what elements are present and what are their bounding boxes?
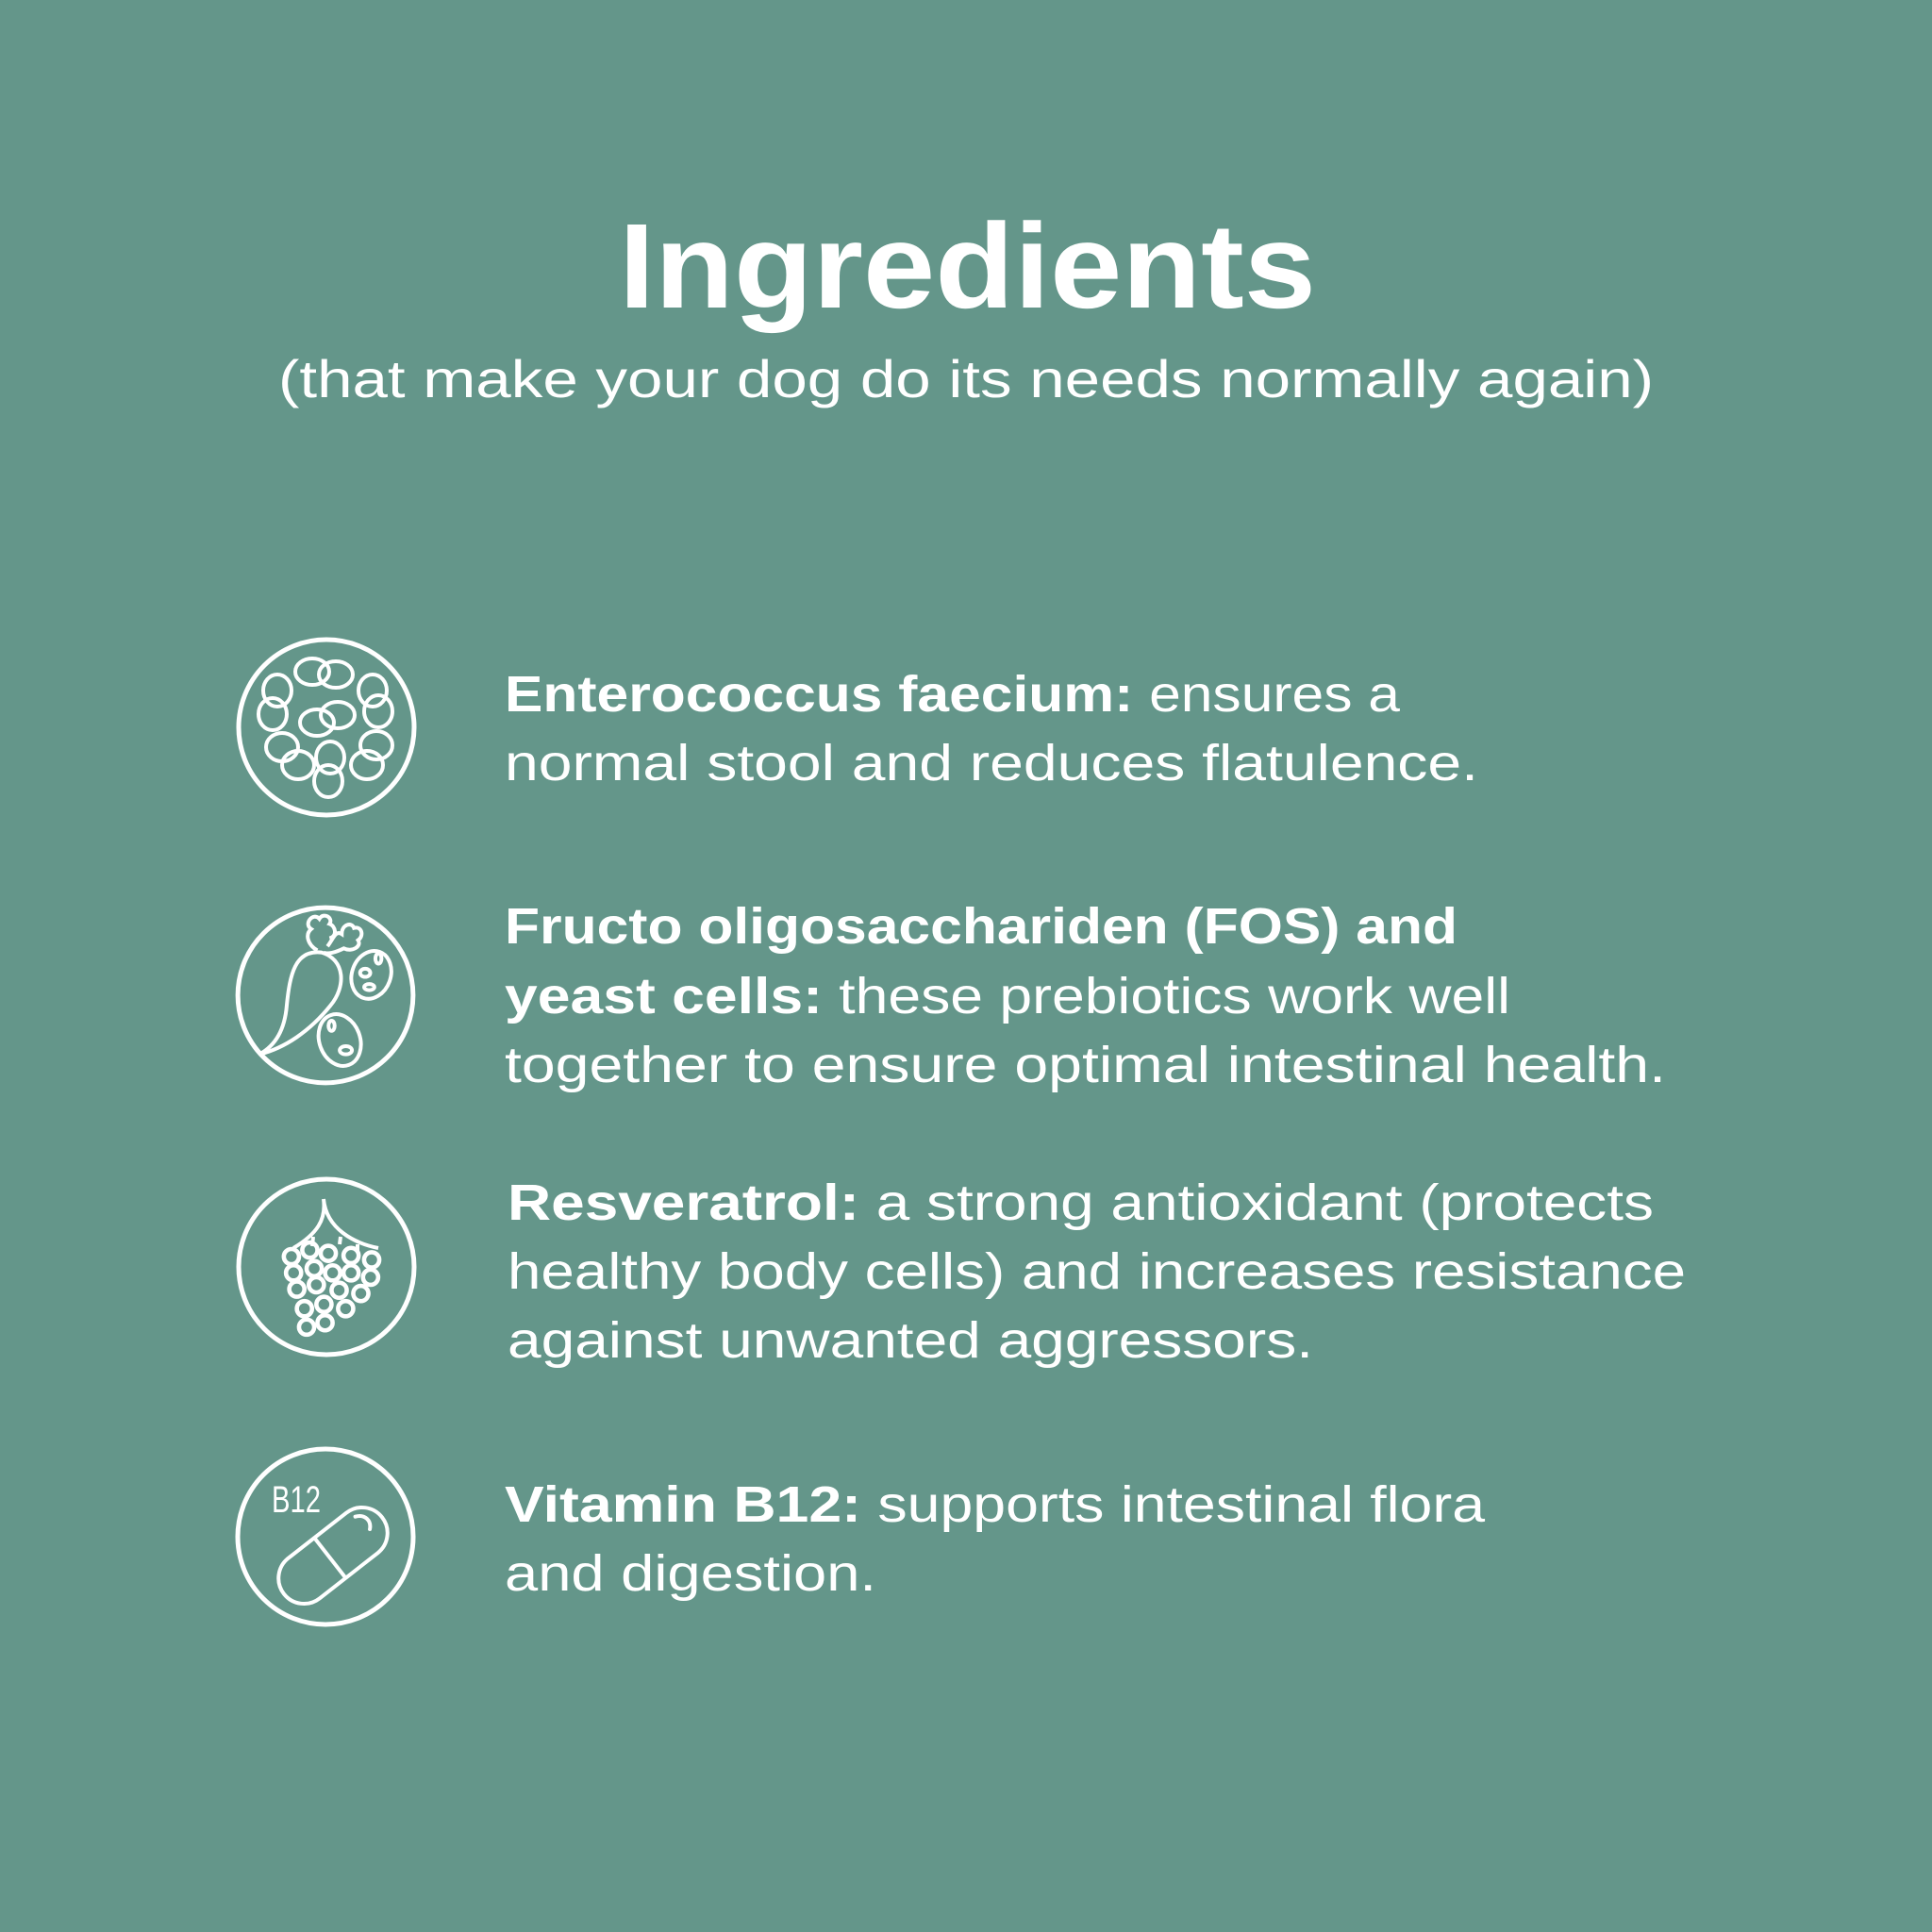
text: Vitamin B12: and digestion.: [505, 1545, 876, 1602]
text: Resveratrol: healthy body cells) and increases resistance: [508, 1243, 1686, 1300]
icon: B12 capsule: B12: [272, 1479, 321, 1521]
icon: carrot and yeast: [238, 908, 413, 1083]
text: Enterococcus: normal stool and reduces flatulence.: [505, 735, 1478, 791]
text: Enterococcus: [505, 666, 1478, 791]
text: FOS: [505, 898, 1666, 1093]
text: Enterococcus: Enterococcus faecium: ensures a: [505, 666, 1401, 723]
text: FOS: Fructo oligosacchariden (FOS) and: [505, 898, 1457, 955]
text: Resveratrol: [508, 1174, 1686, 1369]
text: FOS: yeast cells: these prebiotics work well: [505, 968, 1510, 1024]
text: FOS: together to ensure optimal intestinal health.: [505, 1037, 1666, 1093]
text: Vitamin B12: Vitamin B12: supports intestinal flora: [505, 1476, 1486, 1533]
icon: bacteria: [239, 640, 414, 815]
title: Ingredients: [619, 199, 1316, 334]
text: Resveratrol: against unwanted aggressors.: [508, 1312, 1313, 1369]
icon: grapes: [239, 1179, 414, 1355]
icon: B12 capsule: [238, 1449, 413, 1624]
text: Resveratrol: Resveratrol: a strong antioxidant (protects: [508, 1174, 1654, 1231]
subtitle: (that make your dog do its needs normally again): [278, 349, 1654, 408]
text: Vitamin B12: [505, 1476, 1486, 1602]
